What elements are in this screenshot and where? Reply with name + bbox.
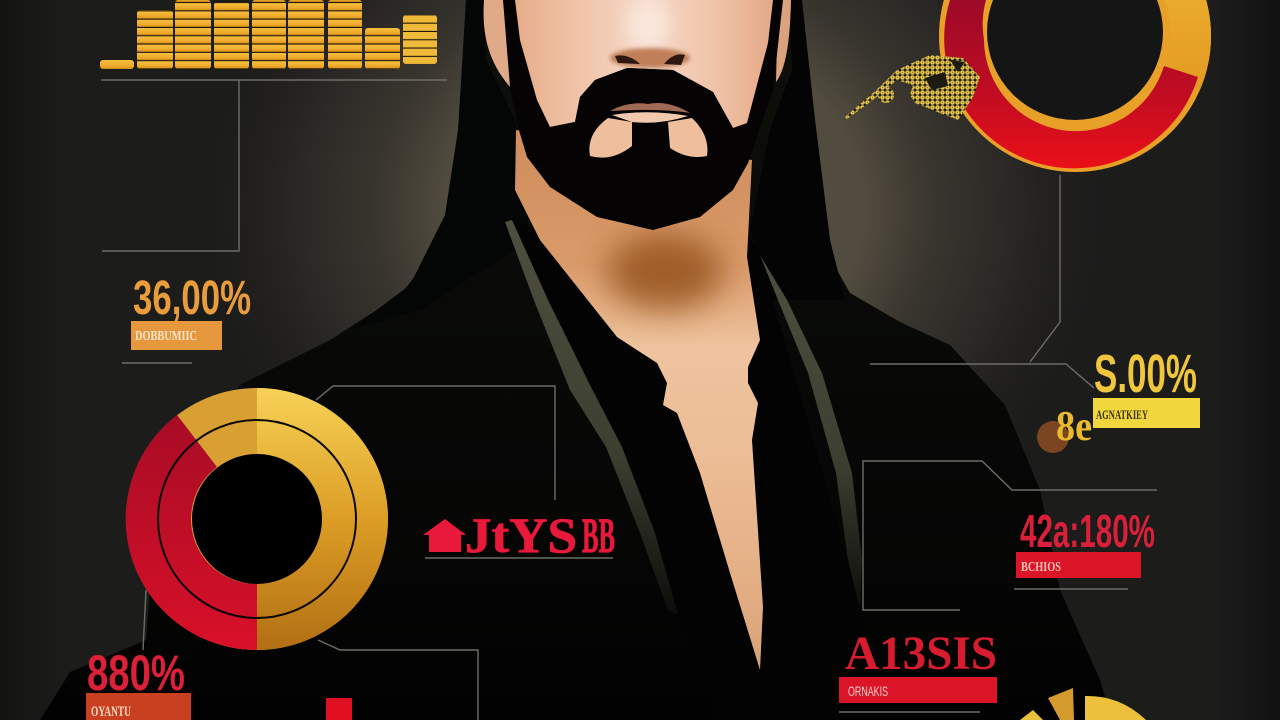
right lapel: [760, 255, 862, 610]
stat: 880%: OYANTU: [91, 704, 131, 720]
chart: bottom-right pie: [1020, 688, 1146, 720]
chart: left donut: [126, 388, 388, 650]
icon: nut with gold glyph: 8e: [1056, 404, 1092, 450]
red house icon with label: [423, 507, 615, 563]
red house icon with label: JtYS: [465, 507, 577, 563]
left ear: [484, 0, 511, 88]
face: [508, 0, 782, 200]
stat: 36,00%: [131, 272, 251, 350]
stat: 42a:180%: BCHIOS: [1021, 560, 1061, 575]
stat: 36,00%: 36,00%: [133, 272, 251, 325]
stat: A13SIS: A13SIS: [845, 627, 997, 680]
hair left: [350, 0, 530, 330]
connector lines: [101, 80, 1157, 720]
stat: 42a:180%: 42a:180%: [1020, 505, 1155, 557]
hair right: [750, 0, 845, 300]
beard: [503, 0, 783, 230]
icon: nut with gold glyph: [1037, 404, 1092, 453]
infographic canvas: BB: [582, 507, 615, 563]
moustache and lower beard fill: [527, 68, 748, 217]
chart: top-right ring: [939, 0, 1211, 172]
stat: 880%: [86, 645, 191, 720]
stat: A13SIS: ORNAKIS: [848, 683, 888, 699]
stat: 42a:180%: [1016, 505, 1155, 578]
stat: S.00%: AGNATKIEY: [1096, 407, 1148, 422]
right ear: [776, 0, 791, 82]
stat: S.00%: [1093, 344, 1200, 428]
icon: house: [423, 519, 466, 552]
left lapel: [505, 220, 678, 615]
stat: A13SIS: [839, 627, 997, 703]
red bar: [326, 698, 352, 720]
stat: S.00%: S.00%: [1094, 344, 1197, 404]
icon: gold dotted swoosh: [845, 55, 980, 120]
neck and chest: [515, 130, 763, 670]
black shirt: [510, 222, 862, 720]
stat: 880%: 880%: [87, 645, 185, 701]
chart: gold coin stacks: [100, 0, 437, 69]
chin patches: [589, 118, 707, 158]
lips: [610, 103, 690, 123]
stat: 36,00%: DOBBUMIIC: [135, 329, 197, 344]
neck shadow: [607, 234, 723, 310]
nose: [610, 0, 690, 68]
